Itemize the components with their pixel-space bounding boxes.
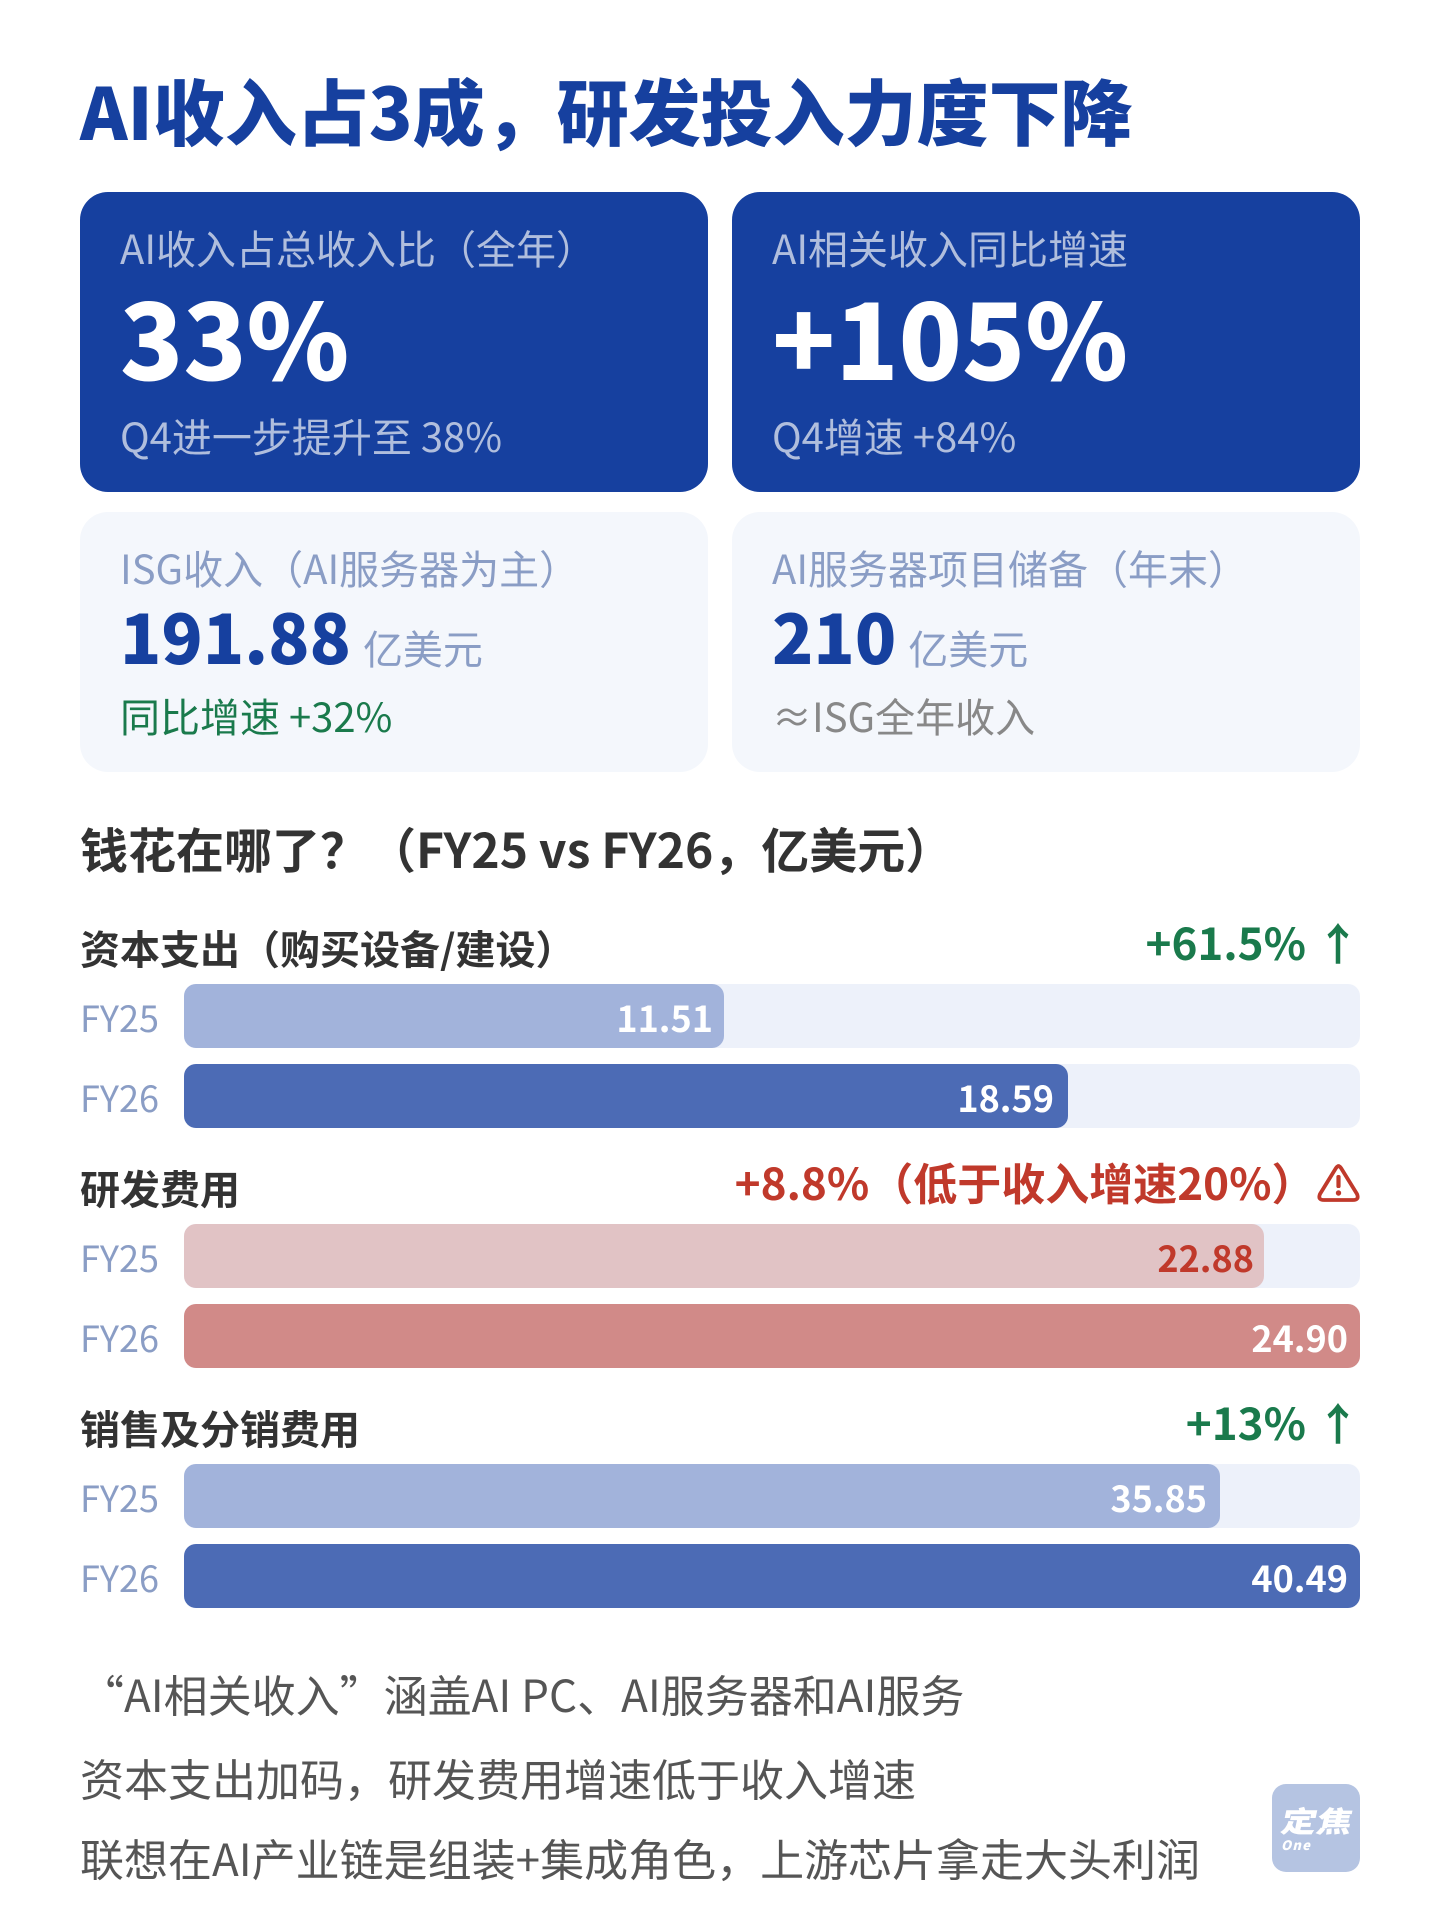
icon: warning triangle <box>1317 1164 1360 1202</box>
bar row: sales FY26 <box>80 1544 1360 1608</box>
section heading: 钱花在哪了？（FY25 vs FY26，亿美元） <box>80 812 953 882</box>
panel: capital expenditure chart <box>80 909 1360 1128</box>
bar row: R&D FY25: FY25 <box>80 1231 159 1283</box>
panel: sales and distribution expense chart <box>80 1389 1360 1608</box>
delta: sales growth: +13% ↑ <box>1186 1389 1360 1453</box>
sub text: equals ISG annual revenue: ≈ISG全年收入 <box>772 686 1035 744</box>
panel: AI revenue growth <box>732 192 1360 492</box>
bar row: capex FY25: 11.51 <box>616 991 713 1043</box>
logo text: 定焦 <box>1278 1799 1357 1840</box>
title: AI收入占3成，研发投入力度下降 <box>80 56 1133 161</box>
bar row: R&D FY26: FY26 <box>80 1311 159 1363</box>
heading: sales: 销售及分销费用 <box>80 1398 360 1456</box>
panel: AI revenue share <box>80 192 708 492</box>
bar row: R&D FY26 <box>80 1304 1360 1368</box>
panel: ISG revenue <box>80 512 708 772</box>
sub text: Q4 growth: Q4增速 +84% <box>772 406 1016 464</box>
footnote: line 2: 资本支出加码，研发费用增速低于收入增速 <box>80 1745 916 1809</box>
bar row: capex FY26: FY26 <box>80 1071 159 1123</box>
delta: capex growth: +61.5% ↑ <box>1146 909 1360 973</box>
delta: R&D growth: +8.8%（低于收入增速20%） <box>735 1149 1316 1213</box>
bar row: sales FY25: 35.85 <box>1110 1471 1207 1523</box>
bar row: sales FY26: 40.49 <box>1251 1551 1348 1603</box>
sub text: ISG growth: 同比增速 +32% <box>120 686 392 744</box>
footnote: line 3: 联想在AI产业链是组装+集成角色，上游芯片拿走大头利润 <box>80 1825 1200 1889</box>
label: AI revenue share: AI收入占总收入比（全年） <box>120 218 596 276</box>
logo subtext: One <box>1281 1835 1311 1854</box>
footnote: line 1: “AI相关收入”涵盖AI PC、AI服务器和AI服务 <box>80 1661 964 1725</box>
big number: 33%: 33% <box>120 259 349 410</box>
bar row: capex FY25 <box>80 984 1360 1048</box>
bar row: capex FY25: FY25 <box>80 991 159 1043</box>
sub text: Q4 share: Q4进一步提升至 38% <box>120 406 502 464</box>
logo badge <box>1272 1784 1360 1872</box>
panel: AI server backlog <box>732 512 1360 772</box>
label: AI server backlog: AI服务器项目储备（年末） <box>772 538 1248 596</box>
label: ISG revenue: ISG收入（AI服务器为主） <box>120 538 579 596</box>
bar row: R&D FY25: 22.88 <box>1157 1231 1254 1283</box>
label: AI revenue growth: AI相关收入同比增速 <box>772 218 1128 276</box>
number: 210: 210 亿美元 <box>772 585 1028 684</box>
bar row: sales FY25: FY25 <box>80 1471 159 1523</box>
number: 191.88: 191.88 亿美元 <box>120 585 483 684</box>
panel: R&D expense chart <box>80 1149 1360 1368</box>
bar row: sales FY26: FY26 <box>80 1551 159 1603</box>
heading: capex: 资本支出（购买设备/建设） <box>80 918 575 976</box>
bar row: capex FY26: 18.59 <box>957 1071 1054 1123</box>
bar row: sales FY25 <box>80 1464 1360 1528</box>
heading: R&D: 研发费用 <box>80 1158 240 1216</box>
big number: +105%: +105% <box>772 259 1128 410</box>
bar row: R&D FY26: 24.90 <box>1251 1311 1348 1363</box>
bar row: R&D FY25 <box>80 1224 1360 1288</box>
bar row: capex FY26 <box>80 1064 1360 1128</box>
